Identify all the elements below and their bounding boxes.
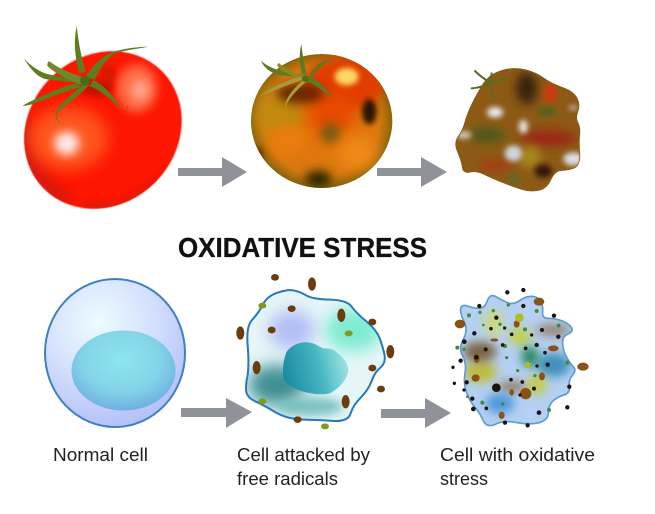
dark radicals [451, 288, 571, 427]
label: cell with oxidative stress: Cell with oxidative [440, 444, 595, 465]
nucleus [283, 342, 348, 394]
green radicals [455, 303, 569, 412]
label: cell with oxidative stress: stress [440, 468, 488, 489]
cell attacked by free radicals [236, 274, 394, 429]
heading: OXIDATIVE STRESS [178, 232, 427, 263]
normal cell [45, 279, 185, 427]
nucleus [72, 330, 176, 410]
tomato: fresh red [22, 26, 183, 210]
arrow: tomato 1 to 2 [178, 157, 247, 187]
tomato 3 stem [472, 71, 507, 98]
large radicals [455, 298, 589, 419]
tomato stem and leaves [23, 26, 148, 125]
arrow: attacked cell to oxidative stress cell [381, 398, 451, 428]
label: normal cell: Normal cell [53, 444, 148, 465]
label: cell attacked by free radicals: free radicals [237, 468, 338, 489]
tomato: spoiling [251, 44, 392, 188]
free radicals [236, 274, 394, 423]
arrow: tomato 2 to 3 [377, 157, 447, 187]
tomato 2 stem and leaves [259, 44, 333, 107]
label: cell attacked by free radicals: Cell attacked by [237, 444, 371, 465]
tomato: rotten [456, 69, 583, 191]
cell with oxidative stress [451, 288, 589, 427]
arrow: normal cell to attacked cell [181, 398, 252, 428]
